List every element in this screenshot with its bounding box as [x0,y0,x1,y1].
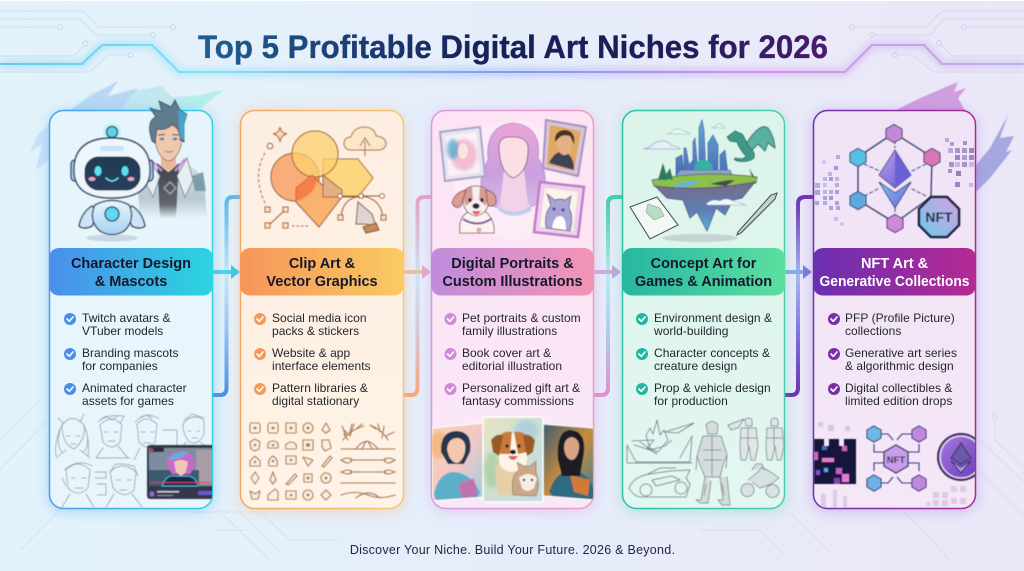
header band: Custom Illustrations [442,274,583,290]
bullet list: Environment design & [654,311,772,325]
header band: Digital Portraits & [451,256,574,272]
illustration: vector shapes and pen tool [258,127,386,233]
arrow connectors [213,197,813,395]
illustration: cyberpunk character [137,100,207,218]
bullet list [254,311,371,408]
bullet list: Pet portraits & custom [462,311,581,325]
Ethereum coin [936,432,975,482]
panel: Clip Art & Vector Graphics [240,110,404,511]
illustration: floating island [643,120,757,242]
bullet list [828,311,957,408]
circuit decoration: top left [0,11,175,72]
header band: Generative Collections [820,274,970,290]
bullet list: collections [845,324,901,338]
header band: NFT Art & [861,256,929,272]
connector: card 3 to card 4 [594,197,622,395]
bullet list: Branding mascots [82,346,179,360]
header band [622,248,785,296]
panel: Digital Portraits & Custom Illustrations [430,110,594,511]
bullet list: & algorithmic design [845,359,954,373]
bullet list: Social media icon [272,311,367,325]
illustration: sketchbook [630,197,678,239]
pixel clusters left [815,155,844,226]
header band: Character Design [71,256,191,272]
bullet list: world-building [653,324,728,338]
illustration: pixel art, network and coin [814,422,985,508]
illustration: concept sketches [627,418,784,505]
bullet list: Character concepts & [654,346,770,360]
ornament dividers [341,424,395,498]
bullet list: Personalized gift art & [462,381,580,395]
bullet list: family illustrations [462,324,557,338]
illustration: pencil [737,193,777,235]
title glow line [0,45,1024,72]
header band [431,248,594,296]
icon grid [250,423,332,500]
header band [49,248,213,296]
pixel avatar [814,422,856,508]
connector: card 1 to card 2 [213,197,240,395]
illustration: sketchbook drawing [646,204,664,220]
NFT network: NFT [887,455,905,466]
header band [240,248,404,296]
header band: Concept Art for [651,256,757,272]
bullet list: packs & stickers [272,324,359,338]
header band: Clip Art & [289,256,356,272]
illustration: dog [452,186,496,233]
bullet list [64,311,187,408]
circuit decoration: bottom [0,400,1024,560]
illustration: NFT badge: NFT [925,209,953,225]
brush strokes behind card 1 [30,81,224,170]
bullet list: Pattern libraries & [272,381,368,395]
bullet list: interface elements [272,359,371,373]
illustration: character sketches [56,414,212,507]
bullet list: Prop & vehicle design [654,381,771,395]
illustration: cat frame [534,182,584,237]
header band: Games & Animation [635,274,772,290]
bullet list: limited edition drops [845,394,952,408]
illustration: robot mascot [71,123,153,242]
bullet list: fantasy commissions [462,394,574,408]
bullet list: for production [654,394,728,408]
bullet list: for companies [82,359,158,373]
bullet list: Book cover art & [462,346,551,360]
title: Top 5 Profitable Digital Art Niches for 2026 [198,29,828,65]
bullet list [444,311,581,408]
illustration: watercolor frame [440,127,485,181]
bullet list: VTuber models [82,324,163,338]
panel: NFT Art & Generative Collections [813,110,985,511]
illustration: woman portrait [453,120,573,240]
connector: card 2 to card 3 [404,197,431,395]
bullet list [636,311,772,408]
illustration: NFT badge [919,197,959,237]
bullet list: Digital collectibles & [845,381,952,395]
illustration: dragon [727,127,775,162]
bullet list: Website & app [272,346,351,360]
bullet list: Generative art series [845,346,957,360]
panel: Character Design & Mascots [49,100,214,511]
bullet list: PFP (Profile Picture) [845,311,955,325]
illustration: man portrait frame [543,120,586,176]
connector: card 4 to card 5 [785,197,813,395]
bullet list: editorial illustration [462,359,562,373]
header band: & Mascots [95,274,167,290]
illustration: Ethereum network [850,124,940,232]
NFT network [867,426,926,491]
illustration: watercolor paintings [430,417,594,502]
panel: Concept Art for Games & Animation [622,110,785,511]
bullet list: Twitch avatars & [82,311,171,325]
bullet list: assets for games [82,394,174,408]
footer tagline: Discover Your Niche. Build Your Future. 2026 & Beyond. [350,543,675,557]
brush strokes behind card 5 [896,82,1014,192]
bullet list: creature design [654,359,737,373]
pixel clusters outside right [945,138,974,187]
header band [813,248,976,296]
header band: Vector Graphics [266,274,378,290]
bullet list: Animated character [82,381,187,395]
bullet list: digital stationary [272,394,359,408]
illustration: VTuber stream window [147,445,214,499]
circuit decoration: top right [850,11,1024,72]
